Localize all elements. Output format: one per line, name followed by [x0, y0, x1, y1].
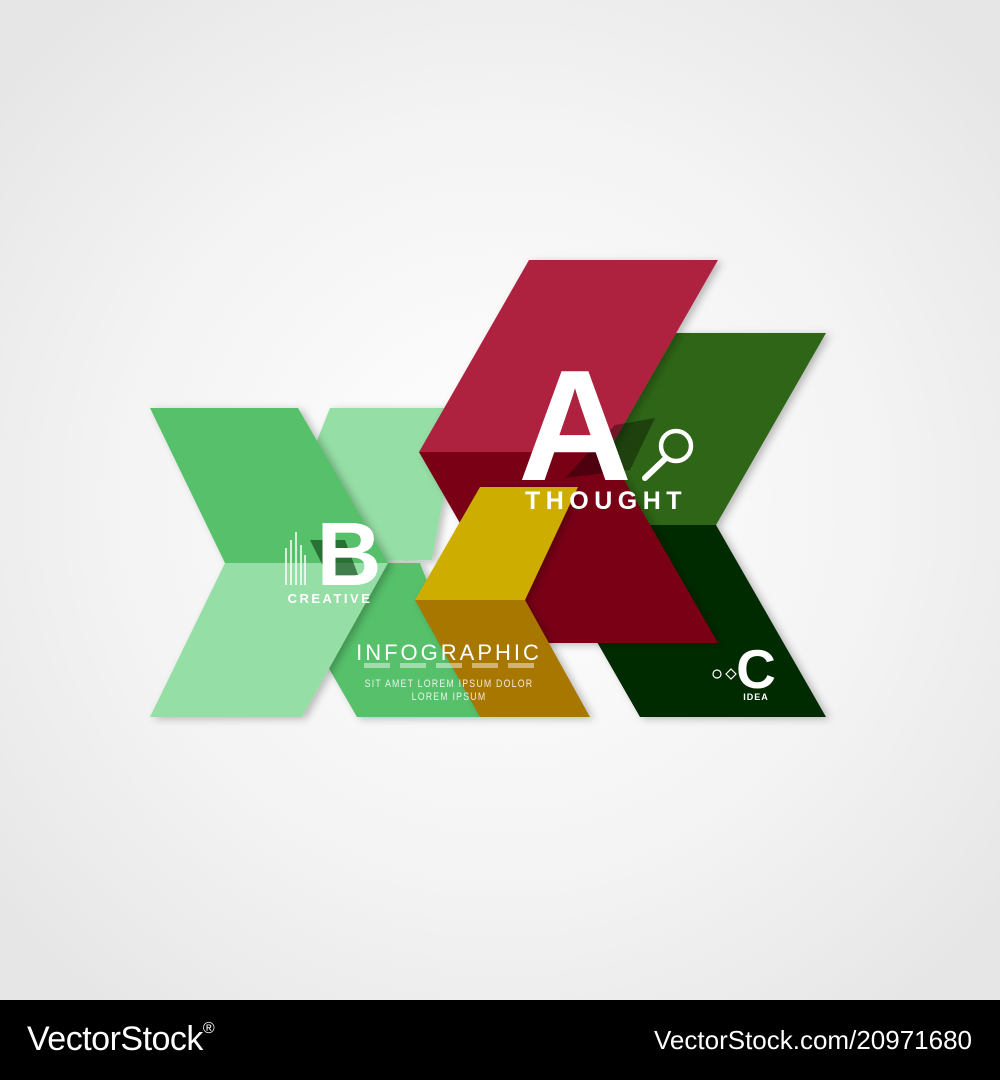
letter A with shadow: A	[518, 338, 632, 514]
panel: light green / medium green chevron	[268, 408, 480, 717]
icon: magnifier	[645, 431, 691, 478]
letter C with icons: IDEA	[743, 692, 769, 702]
panel: red chevron (A)	[419, 260, 718, 643]
text block: INFOGRAPHIC	[356, 640, 542, 703]
text block: INFOGRAPHIC: INFOGRAPHIC	[356, 640, 542, 665]
letter C with icons: C	[736, 638, 776, 700]
letter C with icons	[713, 638, 776, 702]
panel: gold chevron	[415, 487, 590, 717]
text block: INFOGRAPHIC: SIT AMET LOREM IPSUM DOLOR	[365, 678, 533, 690]
panel: dark green chevron (C)	[530, 333, 826, 717]
heading: THOUGHT: THOUGHT	[525, 487, 687, 515]
text block: INFOGRAPHIC: LOREM IPSUM	[412, 691, 486, 703]
label: CREATIVE: CREATIVE	[288, 591, 372, 606]
letter B with bar icon	[286, 505, 382, 605]
footer text right: VectorStock.com/20971680	[654, 1025, 972, 1055]
footer bar	[0, 1000, 1000, 1080]
letter B with bar icon: B	[316, 505, 382, 605]
footer text left: VectorStock®	[27, 1020, 214, 1058]
panel: green chevron (B)	[150, 408, 388, 717]
